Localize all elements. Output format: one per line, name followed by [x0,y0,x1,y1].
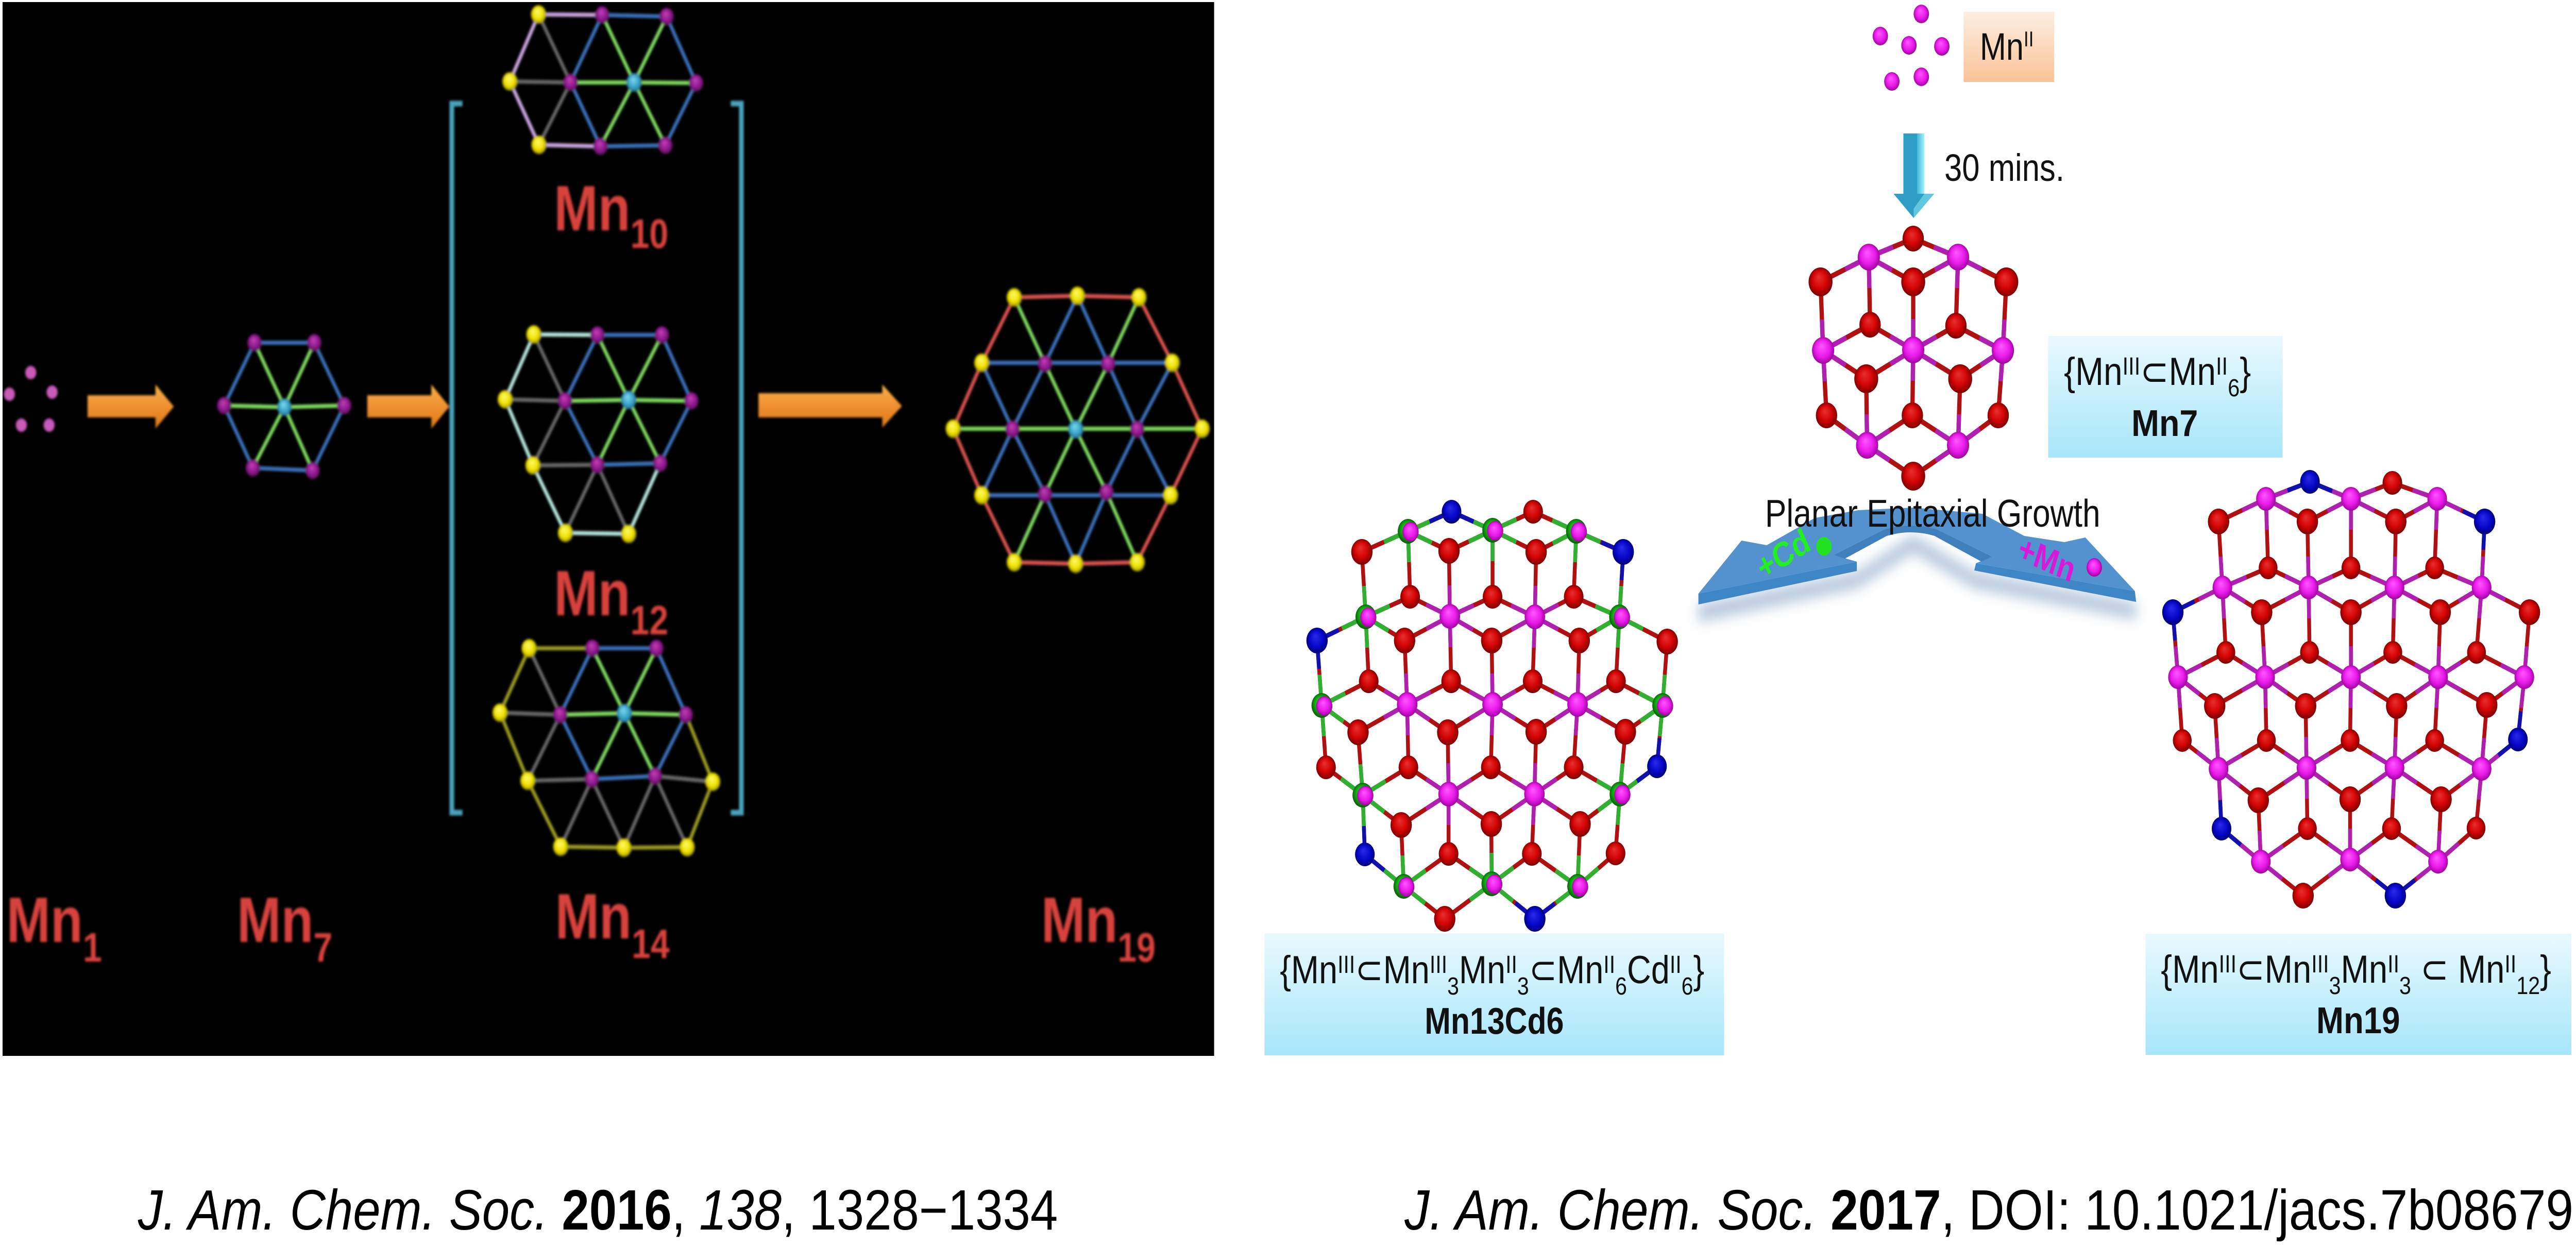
panel: 2016 growth sequence on black [3,2,1214,1056]
arrow: Mn7 to intermediates [367,384,449,429]
box: Mn7 formula: 6 [2228,375,2240,402]
text: 30 mins: 30 mins. [1944,147,2064,189]
arrow: down to Mn7 [1893,133,1934,218]
label: Mn1: Mn [6,885,83,956]
MnII ions [1873,5,1950,91]
box: Mn7 formula: Mn7 [2131,403,2198,444]
box: MnII label [1963,12,2054,82]
label: Mn14: 14 [632,920,670,967]
citation: 2016: J. Am. Chem. Soc. 2016, 138, 1328−1334 [138,1179,1058,1242]
label: Mn7: 7 [313,924,332,970]
label: Mn12: Mn [554,558,630,629]
box: Mn13Cd6 formula: II [1505,951,1517,979]
text: Planar Epitaxial Growth: Planar Epitaxial Growth [1765,492,2100,535]
label: Mn7: Mn [237,885,313,956]
Mn10 cluster [502,5,703,155]
arrow: intermediates to Mn19 [758,384,902,428]
box: Mn19 formula: II [2504,951,2516,978]
box: MnII label: Mn [1980,26,2024,68]
Mn19 cluster [945,287,1210,573]
box: Mn13Cd6 formula: {Mn [1280,948,1336,991]
box: Mn7 formula: {Mn [2064,349,2120,393]
box: Mn13Cd6 formula [1264,933,1724,1055]
box: Mn13Cd6 formula: } [1693,948,1704,991]
box: Mn19 formula: 3 [2329,972,2341,1000]
box: Mn13Cd6 formula: III [1337,951,1355,979]
box: Mn19 formula: III [2311,951,2329,978]
box: Mn7 formula [2048,336,2283,458]
box: Mn19 formula [2145,934,2571,1055]
box: Mn13Cd6 formula: 6 [1615,973,1627,1000]
box: Mn19 formula: II [2387,951,2399,978]
box: Mn19 formula: {Mn [2161,947,2217,991]
label: Mn19: 19 [1117,924,1156,970]
box: Mn13Cd6 formula: Cd [1627,948,1670,991]
atom: Mn [2087,558,2102,577]
box: Mn13Cd6 formula: Mn [1459,948,1505,991]
label: Mn10: Mn [554,173,630,244]
box: Mn13Cd6 formula: 3 [1447,973,1459,1000]
label: Mn10: 10 [630,210,668,257]
box: Mn19 formula: III [2219,951,2236,978]
text: +Cd: +Cd [1751,521,1816,587]
label: Mn12: 12 [630,597,668,643]
Mn1 dots [4,366,58,432]
label: Mn1: 1 [83,924,102,970]
box: Mn7 formula: III [2123,353,2140,380]
box: Mn13Cd6 formula: III [1430,951,1447,979]
text: +Mn: +Mn [2013,529,2080,590]
Mn14 cluster [493,639,720,857]
label: Mn14: Mn [555,881,632,952]
box: Mn13Cd6 formula: ⊂Mn [1355,948,1430,991]
atom: Cd [1816,537,1832,556]
box: Mn7 formula: ⊂Mn [2140,349,2216,393]
box: Mn13Cd6 formula: 6 [1682,973,1693,1000]
box: Mn7 formula: II [2216,353,2228,380]
box: Mn13Cd6 formula: 3 [1517,973,1529,1000]
panel: 2017 planar epitaxial growth scheme [1264,5,2571,1055]
box: Mn7 formula: } [2240,349,2251,393]
Mn7 lattice [1808,226,2018,491]
bracket: right [731,104,741,813]
box: Mn19 formula: 12 [2516,972,2540,1000]
Mn13Cd6 lattice [1307,500,1678,932]
box: Mn19 formula: ⊂Mn [2236,947,2311,991]
box: Mn13Cd6 formula: Mn13Cd6 [1425,1001,1564,1042]
box: Mn19 formula: 3 [2399,972,2411,1000]
label: Mn19: Mn [1041,885,1117,956]
bracket: left [452,104,463,813]
box: Mn19 formula: } [2540,947,2551,991]
box: Mn19 formula: ⊂ Mn [2411,947,2504,991]
box: Mn13Cd6 formula: ⊂Mn [1529,948,1603,991]
citation: 2017: J. Am. Chem. Soc. 2017, DOI: 10.1021/jacs.7b08679 [1404,1179,2573,1242]
arrow: Mn1 to Mn7 [88,384,174,429]
box: Mn13Cd6 formula: II [1670,951,1682,979]
box: Mn13Cd6 formula: II [1603,951,1615,979]
box: Mn19 formula: Mn19 [2316,1000,2400,1041]
Mn7 hexagon cluster [217,334,351,479]
box: MnII label: II [2024,27,2033,52]
Mn19 lattice [2162,470,2540,908]
arrow: branching growth arrow [1699,508,2136,621]
Mn12 cluster [498,325,699,543]
box: Mn19 formula: Mn [2341,947,2387,991]
